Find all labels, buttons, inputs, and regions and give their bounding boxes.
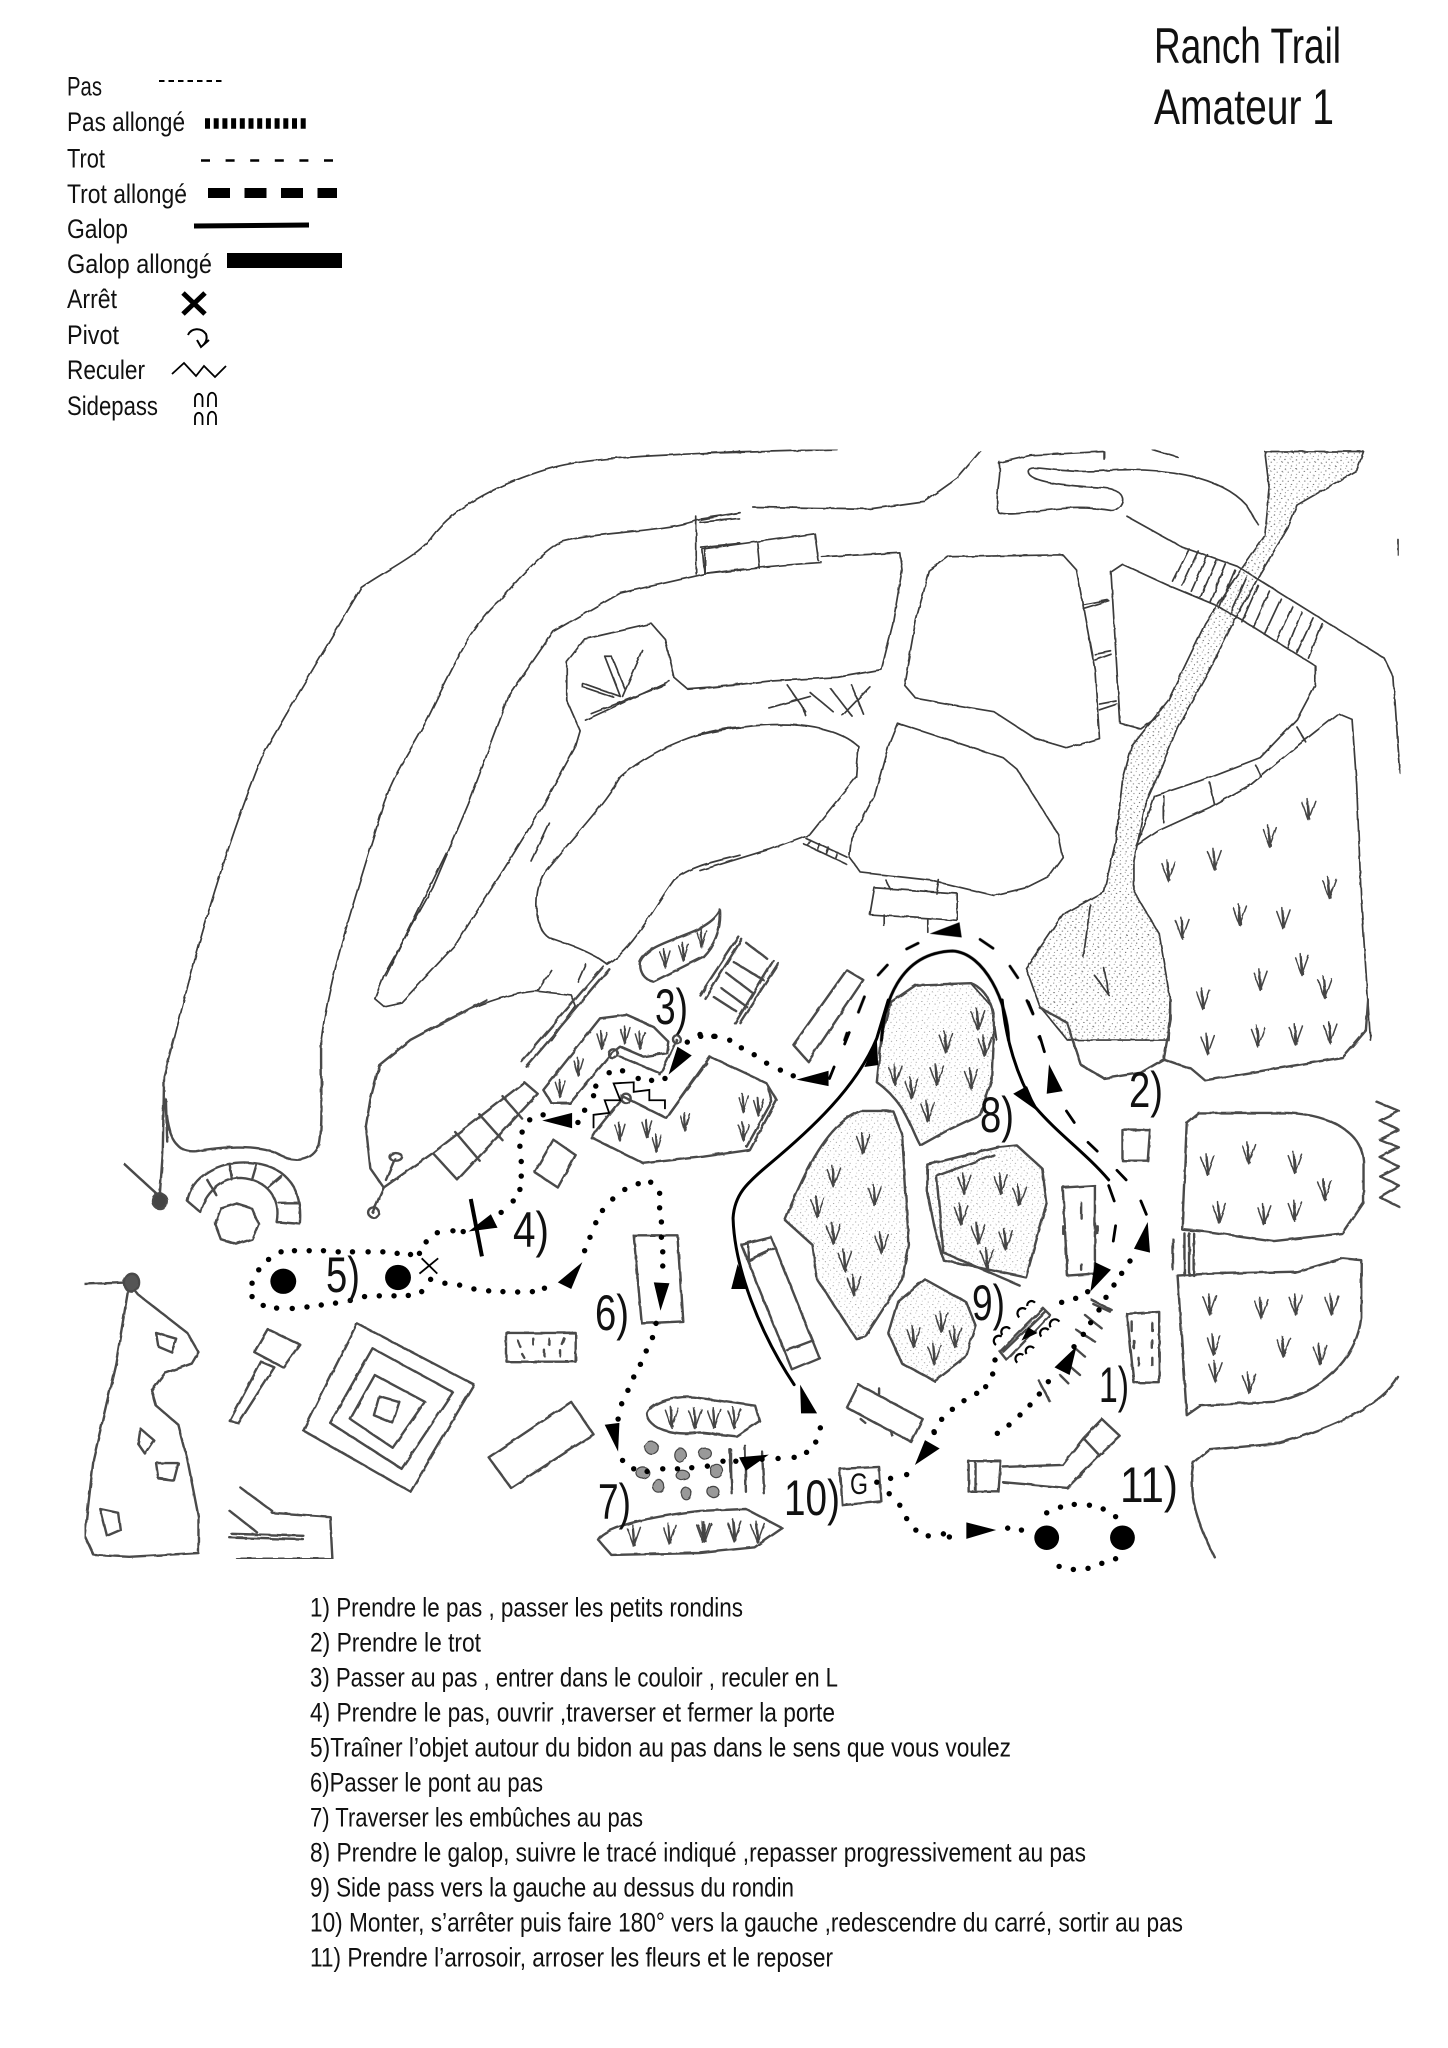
instructions text: 10) Monter, s’arrêter puis faire 180° vers la gauche ,redescendre du carré, sortir au pas: [310, 1908, 1183, 1938]
legend: galop allongé: [67, 249, 342, 279]
legend: pivot: Pivot: [67, 320, 119, 350]
legend: pas allongé: Pas allongé: [67, 107, 185, 137]
legend: sidepass: Sidepass: [67, 391, 158, 421]
route: walk, arrows and barrels left section: [252, 1036, 730, 1471]
legend: pas: Pas: [67, 72, 102, 102]
instructions text: 6)Passer le pont au pas: [310, 1768, 543, 1798]
legend: trot: Trot: [67, 144, 105, 174]
step numbers on the map: 3): [655, 979, 688, 1035]
step numbers on the map: 10): [784, 1470, 840, 1526]
instructions text: 9) Side pass vers la gauche au dessus du rondin: [310, 1873, 794, 1903]
route: walk dots and sidepass marks around rondins: [934, 1261, 1130, 1433]
instructions text: 1) Prendre le pas , passer les petits rondins: [310, 1593, 743, 1623]
letter on the square obstacle: G: [850, 1468, 868, 1501]
instructions text: 11) Prendre l’arrosoir, arroser les fleurs et le reposer: [310, 1943, 833, 1973]
instructions text: 7) Traverser les embûches au pas: [310, 1803, 643, 1833]
map: upper right blocks and river: [700, 450, 1400, 1040]
instructions text: 4) Prendre le pas, ouvrir ,traverser et fermer la porte: [310, 1698, 835, 1728]
step numbers on the map: 6): [595, 1285, 629, 1341]
instructions text: [310, 1593, 1183, 1973]
title: Ranch Trail: [1154, 18, 1341, 74]
title: [1154, 18, 1341, 135]
legend: galop allongé: Galop allongé: [67, 249, 212, 279]
legend: sidepass: [67, 391, 216, 425]
map: logs, 9) rondin and small rondins: [1000, 1300, 1112, 1402]
step numbers on the map: 8): [980, 1087, 1014, 1143]
map: centre obstacles (corridor, ladder, narrow pole): [522, 910, 863, 1163]
title: Amateur 1: [1154, 79, 1334, 135]
step numbers on the map: 11): [1120, 1457, 1178, 1513]
map sketch: [85, 450, 1400, 1559]
legend: reculer: [67, 355, 226, 385]
route: walk, trot, galop and arrows right section: [700, 1000, 1150, 1569]
legend: galop: Galop: [67, 214, 128, 244]
instructions text: 5)Traîner l’objet autour du bidon au pas dans le sens que vous voulez: [310, 1733, 1011, 1763]
legend: arrêt: [67, 284, 205, 314]
step numbers on the map: 5): [326, 1247, 360, 1303]
route: trot and galop upper section: [845, 922, 1041, 1040]
step numbers on the map: 1): [1099, 1357, 1129, 1413]
step numbers on the map: 9): [972, 1275, 1005, 1331]
instructions text: 3) Passer au pas , entrer dans le couloir , reculer en L: [310, 1663, 838, 1693]
legend: pivot: [67, 320, 209, 350]
legend: reculer: Reculer: [67, 355, 145, 385]
legend: [67, 72, 342, 425]
instructions text: 2) Prendre le trot: [310, 1628, 481, 1658]
route overlay: [252, 922, 1150, 1569]
map: lower left obstacles: [85, 1000, 782, 1559]
legend: arrêt: Arrêt: [67, 284, 117, 314]
map: lower right obstacles: [698, 983, 1399, 1557]
map: upper left roads: [174, 451, 740, 1040]
step numbers on the map: 4): [513, 1202, 549, 1258]
legend: trot allongé: Trot allongé: [67, 179, 187, 209]
step numbers on the map: 2): [1129, 1062, 1163, 1118]
step numbers on the map: [326, 979, 1178, 1530]
step numbers on the map: 7): [598, 1474, 631, 1530]
instructions text: 8) Prendre le galop, suivre le tracé indiqué ,repasser progressivement au pas: [310, 1838, 1086, 1868]
